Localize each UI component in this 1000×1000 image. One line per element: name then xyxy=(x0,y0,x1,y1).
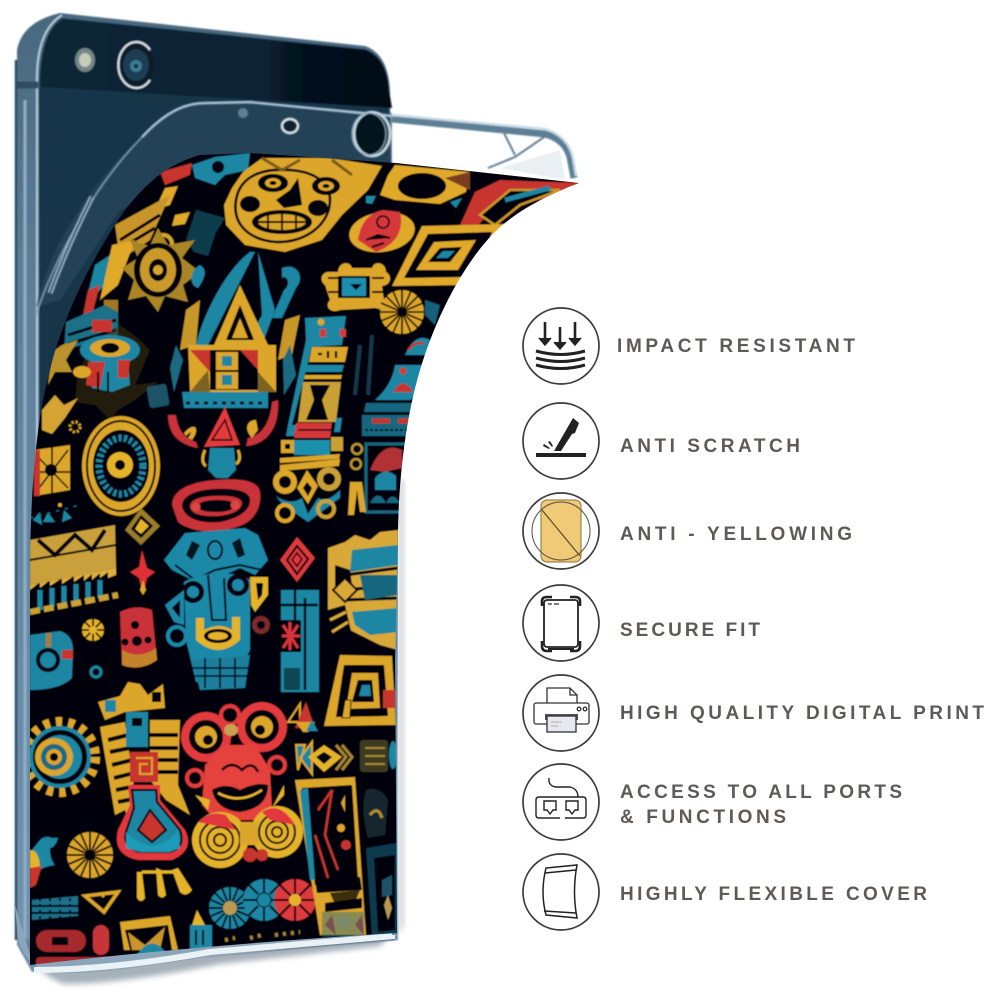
motif: blue temple right xyxy=(348,335,430,515)
motif: left gold square xyxy=(34,445,70,496)
motif: red mask band xyxy=(172,479,260,531)
flash xyxy=(75,48,95,72)
bottom rim body xyxy=(15,905,397,973)
motif: small teal marks xyxy=(30,503,80,525)
feature circle: anti yellowing xyxy=(523,493,599,569)
motif: red oval block xyxy=(120,607,157,668)
icon: ethernet ports xyxy=(536,778,586,818)
motif: dark teal frame right xyxy=(363,789,397,935)
case outer edge xyxy=(36,137,142,315)
case highlight dot xyxy=(238,108,248,118)
motif: gold square with teal centre xyxy=(321,263,390,311)
motif: red tribal face xyxy=(181,702,303,868)
icon: flexed cover xyxy=(543,865,577,918)
motif: gold daisy xyxy=(380,290,424,334)
case corner fold lines xyxy=(488,133,550,168)
motif: sunflower xyxy=(26,723,94,791)
motif: red triangle and curls xyxy=(168,400,278,478)
motif: gold spiral right xyxy=(324,655,397,726)
motif: triangle totem xyxy=(170,252,300,408)
motif: tall gold totem xyxy=(280,316,348,471)
feature circle: impact resistant xyxy=(523,308,599,384)
motif: teal flowers xyxy=(209,879,316,929)
icon: printer xyxy=(534,688,589,732)
sheet artwork xyxy=(30,153,579,965)
motif: top left teal bit xyxy=(155,153,250,226)
motif: gold target circle xyxy=(82,416,160,516)
motif: oval red and gold xyxy=(348,209,416,254)
motif: gold sun xyxy=(122,228,200,312)
motif: small tri cluster xyxy=(288,702,318,732)
motif: red eye sun xyxy=(73,325,170,420)
motif: red diamond xyxy=(280,537,315,582)
feature circle: anti scratch xyxy=(523,403,599,479)
label: and functions: & FUNCTIONS xyxy=(620,807,786,828)
case camera cutout xyxy=(352,112,390,156)
phone side frame xyxy=(17,13,398,972)
motif: gold triangle tile xyxy=(120,916,178,958)
motif: right gold block xyxy=(328,530,398,650)
label: anti yellowing: ANTI - YELLOWING xyxy=(620,524,852,545)
motif: triangle outline xyxy=(85,892,118,912)
feature circle: access to ports xyxy=(523,764,599,840)
motif: red star xyxy=(130,550,155,595)
motif: teal curl left xyxy=(30,837,58,888)
motif: gold starbursts left xyxy=(42,340,78,434)
camera lens xyxy=(118,42,154,88)
case top rim xyxy=(392,119,574,178)
bottom rim shadow xyxy=(22,930,395,984)
motif: top gold block with black circle xyxy=(366,165,470,208)
motif: tall gold figure xyxy=(98,682,192,901)
phone behind the cover xyxy=(16,13,398,972)
case speaker hole xyxy=(282,119,298,133)
motif: small teal tile xyxy=(190,910,300,950)
case side ridge xyxy=(50,197,92,293)
right side shadow xyxy=(397,480,405,935)
bottom rim highlight xyxy=(34,936,395,970)
motif: teal grid band xyxy=(32,896,78,920)
motif: gold flower small xyxy=(82,619,104,641)
phone back panel xyxy=(39,18,395,960)
feature circle: highly flexible cover xyxy=(523,854,599,930)
motif: tall frame xyxy=(295,777,366,937)
label: secure fit: SECURE FIT xyxy=(620,620,760,641)
case translucent fill xyxy=(36,102,392,307)
motif: red pills xyxy=(36,925,111,967)
motif: small teal leaf right xyxy=(425,300,440,325)
motif: gold square spiral xyxy=(392,224,505,286)
label: high quality digital print: HIGH QUALITY DIGITAL PRINT xyxy=(620,703,984,724)
motif: teal glyph block xyxy=(281,590,319,692)
label: access to all ports: ACCESS TO ALL PORTS xyxy=(620,782,902,803)
motif: teal winged glyph xyxy=(154,210,225,256)
feature circle: high quality digital print xyxy=(523,675,599,751)
phone frame highlights xyxy=(37,15,62,940)
motif: stacked gold stripes xyxy=(82,195,170,322)
sheet background xyxy=(30,153,579,965)
motif: gold stripe band xyxy=(30,525,118,612)
case bottom rim xyxy=(15,480,405,984)
motif: gold diamond xyxy=(125,508,160,545)
motif: gold rings under totem xyxy=(276,470,340,522)
motif: gold mask xyxy=(224,158,382,252)
motif: blue mask xyxy=(164,528,270,690)
icon: impact arrows xyxy=(536,322,585,368)
label: highly flexible cover: HIGHLY FLEXIBLE COVER xyxy=(620,884,927,905)
label: anti scratch: ANTI SCRATCH xyxy=(620,436,800,457)
motif: top right corner pattern xyxy=(459,179,579,226)
transparent case xyxy=(36,102,576,315)
phone glass band xyxy=(41,19,392,108)
motif: gold star wheel xyxy=(67,832,113,878)
icon: blade scratching a surface xyxy=(536,418,586,457)
icon: phone with corner bumpers xyxy=(542,597,580,651)
printed tribal pattern sheet xyxy=(30,153,579,965)
icon: yellowed phone crossed out xyxy=(532,500,590,562)
motif: teal rounded block xyxy=(30,631,101,690)
feature circle: secure fit xyxy=(523,585,599,661)
motif: diamond band xyxy=(293,740,397,776)
label: impact resistant: IMPACT RESISTANT xyxy=(617,336,855,357)
motif: bottom left small teal grid xyxy=(64,305,118,350)
motif: small dotted circle xyxy=(70,422,80,432)
